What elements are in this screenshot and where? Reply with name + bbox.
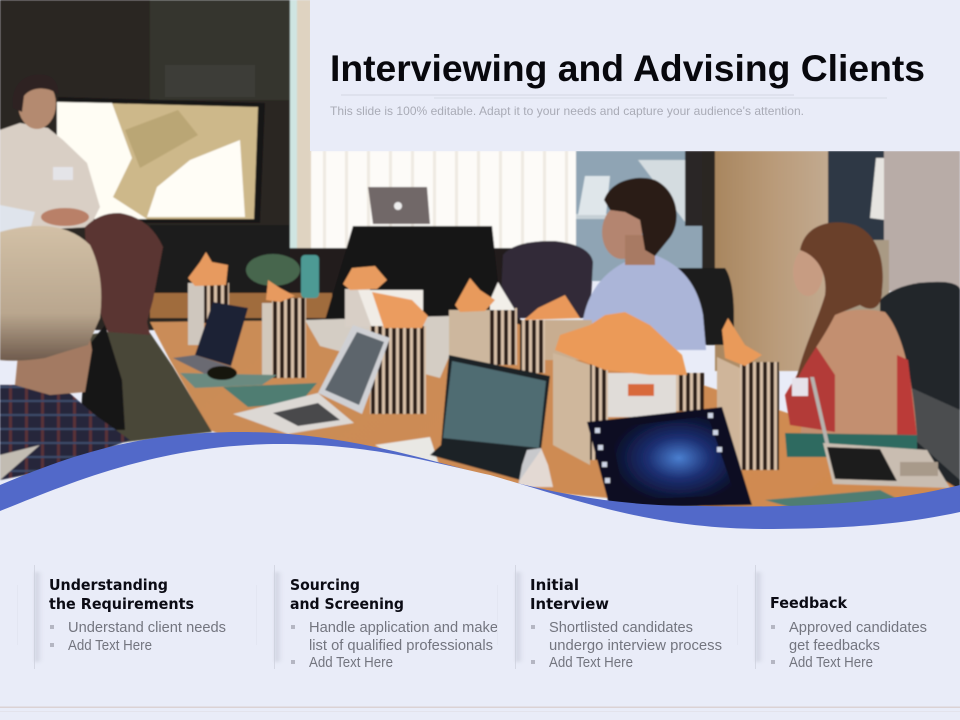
bullet list: Add Text Here (68, 638, 152, 654)
wave: blue band (0, 432, 960, 530)
column: Understanding the Requirements (17, 565, 226, 669)
heading: Understanding (49, 576, 168, 594)
photo: foreground woman with brown hair (80, 213, 212, 445)
footer rule (0, 706, 960, 712)
bullet list: Shortlisted candidates (549, 620, 693, 636)
photo: meeting room with presenter and attendees (0, 0, 960, 530)
photo: back walls (0, 0, 960, 371)
subtitle: This slide is 100% editable. Adapt it to your needs and capture your audience's attention. (330, 104, 804, 118)
heading (530, 576, 609, 613)
bullet list (531, 620, 722, 671)
heading: and Screening (290, 595, 404, 613)
bullet list (291, 620, 498, 671)
photo: table background and shelf (150, 187, 960, 530)
photo: laptops and folders on the table (173, 302, 950, 510)
heading (290, 576, 404, 613)
bullet list: Handle application and make (309, 620, 498, 636)
panel: title header (310, 0, 960, 151)
title: Interviewing and Advising Clients (330, 48, 925, 89)
heading: Interview (530, 595, 609, 613)
wave: pale lower panel (0, 444, 960, 720)
bullet list: Understand client needs (68, 620, 226, 636)
heading: Feedback (770, 594, 848, 612)
heading: the Requirements (49, 595, 194, 613)
photo: gift bags with orange tissue (188, 252, 779, 470)
photo: seated man in blue shirt (583, 178, 706, 350)
bullet list: undergo interview process (549, 638, 722, 654)
photo: presenter (0, 74, 100, 232)
heading (49, 576, 194, 613)
bullet list (771, 620, 927, 671)
bullet list: Add Text Here (549, 655, 633, 671)
photo: seated woman in red top (785, 222, 917, 437)
bullet list: list of qualified professionals (309, 638, 493, 654)
bullet list: Add Text Here (309, 655, 393, 671)
photo: foreground man with blond hair (0, 226, 130, 480)
bullet list: get feedbacks (789, 638, 880, 654)
column: Sourcing and Screening (256, 565, 498, 671)
column: Initial Interview (497, 565, 722, 671)
heading: Sourcing (290, 576, 360, 594)
heading: Initial (530, 576, 579, 594)
bullet list: Add Text Here (789, 655, 873, 671)
column: Feedback (737, 565, 927, 671)
photo: presentation screen (56, 97, 265, 223)
bullet list (50, 620, 226, 654)
photo: chairs (500, 241, 960, 490)
bullet list: Approved candidates (789, 620, 927, 636)
photo: plant and bottle (246, 254, 319, 298)
